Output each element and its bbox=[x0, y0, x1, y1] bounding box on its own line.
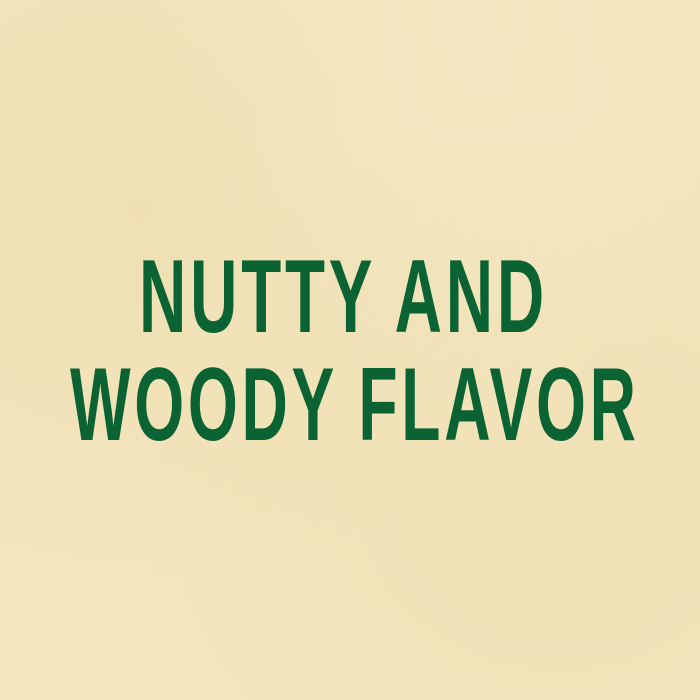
heading bbox=[70, 239, 640, 463]
heading line 2: WOODY FLAVOR bbox=[70, 347, 640, 463]
heading line 1: NUTTY AND bbox=[139, 239, 548, 355]
